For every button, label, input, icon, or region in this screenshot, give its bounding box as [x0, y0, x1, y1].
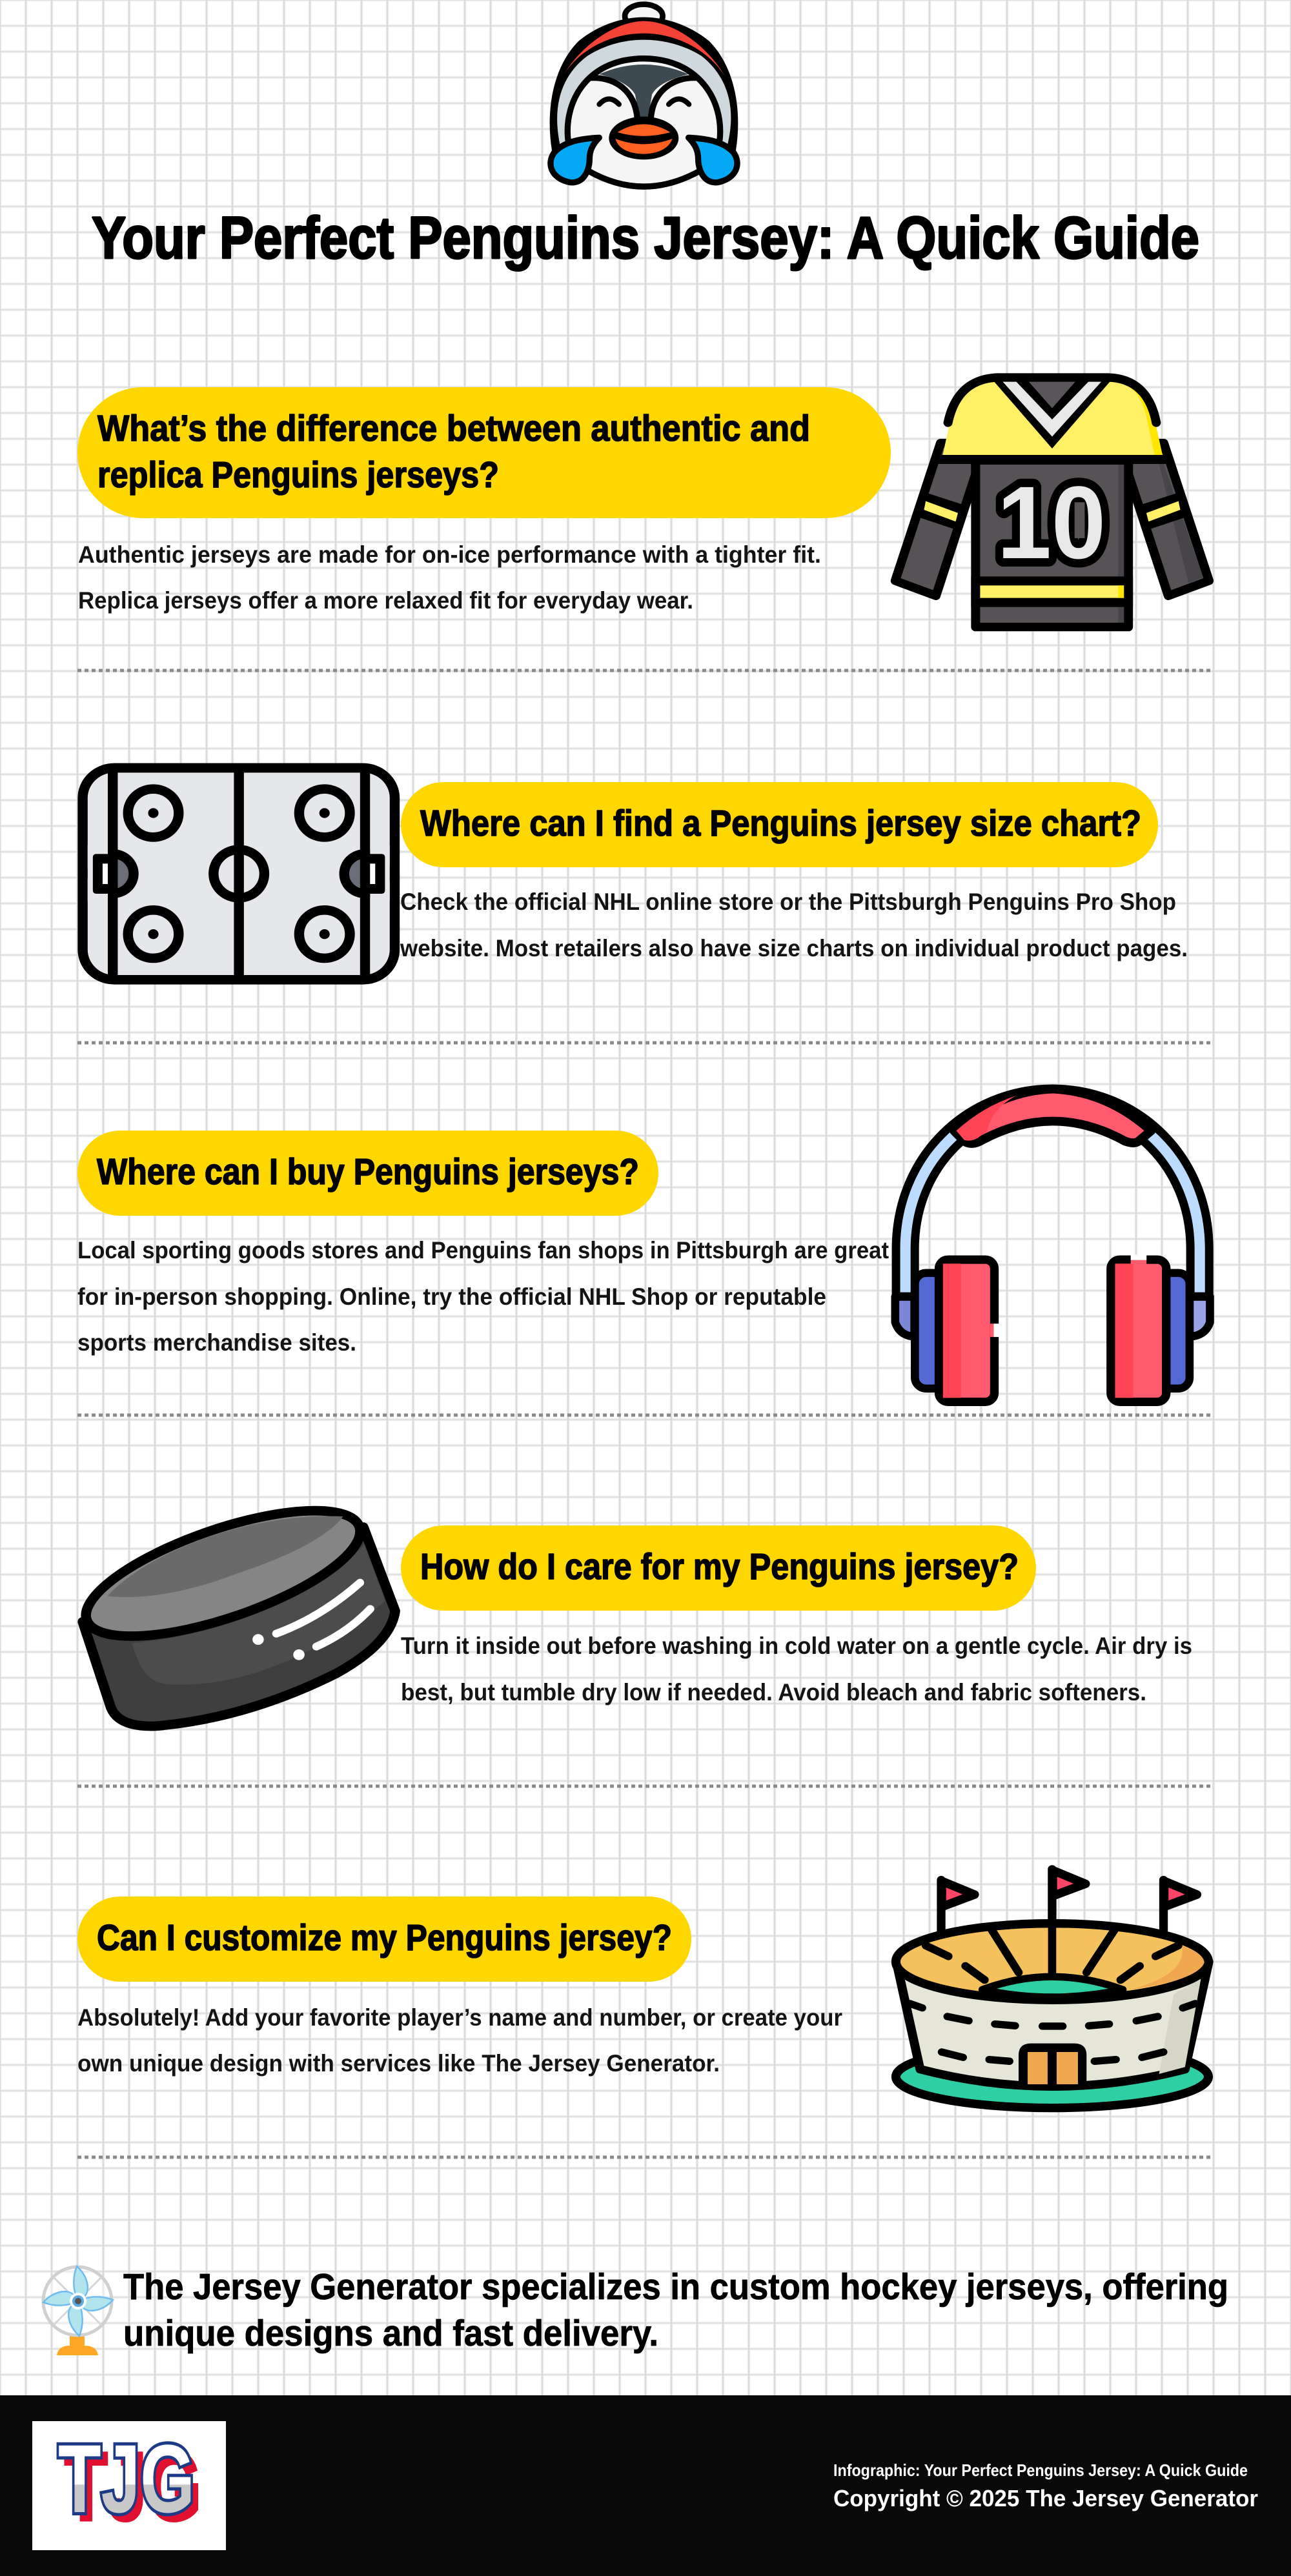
body text: authentic vs replica [78, 541, 821, 614]
heading pill: where to buy: Where can I buy Penguins jerseys? [97, 1151, 639, 1192]
body text: size chart [400, 889, 1188, 961]
heading pill: jersey care [401, 1525, 1036, 1611]
body text: where to buy: for in-person shopping. Online, try the official NHL Shop or reputable [77, 1283, 826, 1310]
body text: authentic vs replica: Replica jerseys offer a more relaxed fit for everyday wear. [78, 587, 693, 614]
body text: customization [77, 2004, 842, 2077]
divider 1 [77, 669, 1214, 672]
footer band [0, 2395, 1291, 2576]
panel: authentic vs replica [77, 377, 1209, 627]
heading pill: customization: Can I customize my Penguins jersey? [97, 1917, 672, 1958]
panel: where to buy [77, 1089, 1210, 1402]
icon: laughing penguin with hat [550, 5, 738, 187]
body text: where to buy: Local sporting goods stores and Penguins fan shops in Pittsburgh are great [77, 1237, 889, 1263]
body text: authentic vs replica: Authentic jerseys are made for on-ice performance with a tighter fit. [78, 541, 821, 568]
icon: hockey rink [83, 768, 394, 980]
divider 4 [77, 1785, 1214, 1787]
footer credits: Infographic: Your Perfect Penguins Jersey: A Quick Guide [833, 2460, 1248, 2480]
body text: size chart: website. Most retailers also have size charts on individual product pages. [400, 935, 1188, 961]
icon: hockey jersey number 10 [895, 377, 1209, 627]
logo: TJG: TJG [65, 2432, 201, 2541]
body text: jersey care: best, but tumble dry low if needed. Avoid bleach and fabric softeners. [401, 1679, 1146, 1706]
closing statement: The Jersey Generator specializes in custom hockey jerseys, offering [123, 2266, 1228, 2308]
closing statement [123, 2266, 1228, 2354]
heading pill: where to buy [77, 1131, 658, 1216]
body text: where to buy: sports merchandise sites. [77, 1329, 356, 1356]
panel: jersey care [71, 1485, 1192, 1726]
logo: TJG [32, 2421, 226, 2550]
icon: hockey jersey number 10: 10 [997, 465, 1106, 580]
body text: jersey care [401, 1633, 1192, 1706]
body text: where to buy [77, 1237, 889, 1356]
logo: TJG: TJG [58, 2424, 195, 2533]
heading pill: size chart: Where can I find a Penguins jersey size chart? [420, 803, 1141, 844]
body text: customization: Absolutely! Add your favorite player’s name and number, or create your [77, 2004, 842, 2031]
footer credits [833, 2460, 1258, 2511]
icon: headphones [895, 1089, 1210, 1402]
panel: customization [77, 1869, 1209, 2108]
heading pill: size chart [401, 782, 1158, 867]
divider 5 [77, 2155, 1214, 2159]
closing statement: unique designs and fast delivery. [123, 2313, 658, 2354]
icon: hockey puck [71, 1485, 395, 1726]
icon: desk fan [43, 2266, 113, 2355]
body text: size chart: Check the official NHL online store or the Pittsburgh Penguins Pro Shop [400, 889, 1176, 915]
heading pill: authentic vs replica: replica Penguins jerseys? [97, 454, 499, 496]
body text: customization: own unique design with services like The Jersey Generator. [77, 2050, 720, 2077]
divider 3 [77, 1413, 1214, 1417]
heading pill: authentic vs replica: What’s the difference between authentic and [97, 408, 810, 449]
footer credits: Copyright © 2025 The Jersey Generator [833, 2485, 1258, 2511]
panel: size chart [83, 768, 1188, 980]
heading pill: customization [77, 1897, 691, 1982]
icon: stadium with flags [896, 1869, 1209, 2108]
divider 2 [77, 1041, 1214, 1044]
heading pill: authentic vs replica [77, 387, 891, 518]
heading pill: jersey care: How do I care for my Penguins jersey? [420, 1546, 1019, 1587]
body text: jersey care: Turn it inside out before washing in cold water on a gentle cycle. Air dry is [401, 1633, 1192, 1659]
